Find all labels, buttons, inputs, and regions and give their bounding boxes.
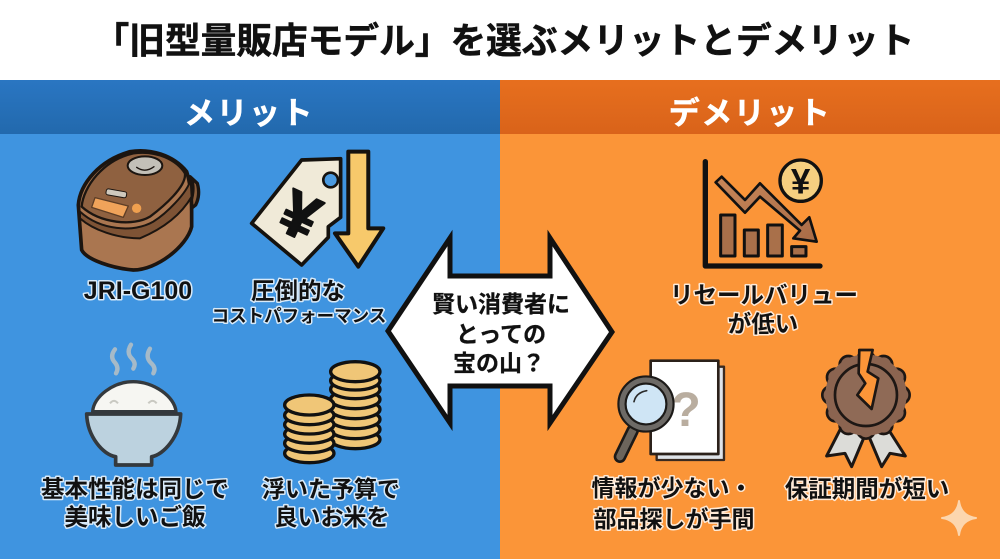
double arrow callout [388,238,612,423]
label: overwhelming cost performance: コストパフォーマンス [212,306,386,326]
icon: price tag with down arrow [252,152,383,267]
icon: magnifier and documents: ? [671,383,701,437]
title: 「旧型量販店モデル」を選ぶメリットとデメリット [94,21,914,61]
label: JRI-G100: JRI-G100 [84,277,192,305]
label: overwhelming cost performance: 圧倒的な [251,278,345,304]
label: overwhelming cost performance [212,278,386,326]
double arrow callout: とっての [456,321,546,347]
label: little information: 情報が少ない・ [592,475,752,501]
merits header: メリット [184,96,314,131]
icon: coin stacks [285,362,380,463]
label: short warranty: 保証期間が短い [785,475,949,502]
label: basic performance [41,476,229,530]
label: low resale value: が低い [728,310,798,337]
icon: broken warranty rosette [822,350,910,467]
label: low resale value: リセールバリュー [670,282,858,308]
label: spare budget [262,476,400,530]
label: spare budget: 浮いた予算で [262,476,400,502]
label: low resale value [670,282,858,337]
demerits header: デメリット [669,96,831,131]
double arrow callout: 宝の山？ [453,350,545,376]
double arrow callout: 賢い消費者に [432,291,570,317]
label: basic performance: 美味しいご飯 [64,503,206,530]
label: little information: 部品探しが手間 [594,506,754,532]
icon: falling value chart [705,160,821,266]
panel: demerits [500,80,1000,559]
label: basic performance: 基本性能は同じで [41,476,229,502]
merits header [0,80,500,134]
icon: rice bowl [87,345,181,465]
icon: price tag with down arrow: ¥ [269,177,330,255]
label: little information [592,475,754,532]
icon: sparkle [942,501,976,535]
demerits header [500,80,1000,134]
label: spare budget: 良いお米を [274,504,390,530]
icon: rice cooker [78,151,199,270]
icon: magnifier and documents [620,361,724,460]
panel: merits [0,80,500,559]
icon: falling value chart: ¥ [791,162,811,201]
